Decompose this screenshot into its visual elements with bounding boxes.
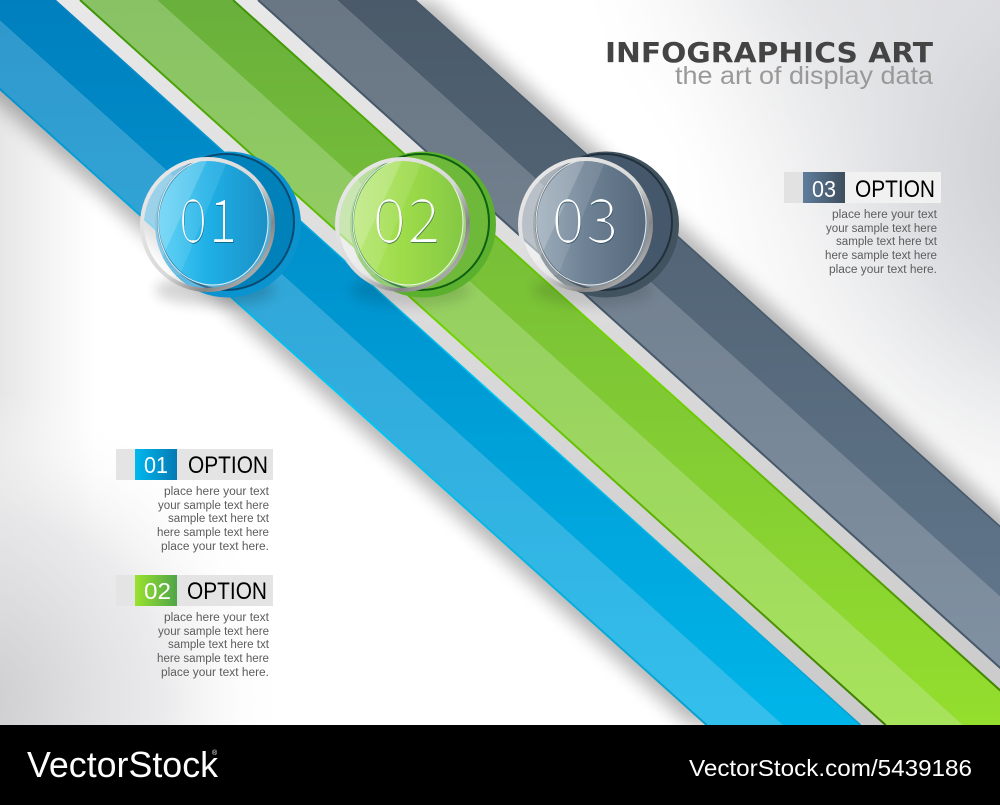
- option 03 block: [784, 172, 941, 276]
- option 01 text: place here your text: [164, 486, 270, 498]
- option 02 text: place your text here.: [161, 667, 269, 679]
- option 02 text: place here your text: [164, 612, 270, 624]
- option 01 header: OPTION: [188, 452, 268, 479]
- number 02: 02: [372, 171, 441, 261]
- option 01 text: here sample text here: [157, 527, 269, 539]
- option 01 text: sample text here txt: [168, 513, 270, 525]
- option 02 header: 02: [144, 578, 171, 604]
- option 03 text: place your text here.: [829, 264, 937, 276]
- option 02 text: here sample text here: [157, 653, 269, 665]
- number 03: 03: [551, 171, 619, 261]
- brand logo text: VectorStock: [27, 744, 219, 785]
- option 02 header: OPTION: [187, 578, 267, 605]
- blue diagonal band: [0, 0, 861, 725]
- grey diagonal band: [258, 0, 1000, 725]
- option 02 text: [157, 612, 270, 679]
- registered mark: ®: [212, 749, 218, 757]
- option 03 header: [784, 172, 941, 203]
- option 02 block: [116, 575, 273, 679]
- option 03 text: your sample text here: [826, 223, 937, 235]
- option 01 text: your sample text here: [158, 500, 269, 512]
- badge 03: [508, 150, 679, 306]
- image id: VectorStock.com/5439186: [689, 755, 972, 781]
- option 01 header: 01: [144, 452, 168, 478]
- badge 01: [130, 150, 301, 306]
- option 03 header: 03: [812, 176, 836, 202]
- subtitle: the art of display data: [675, 62, 933, 90]
- option 01 block: [116, 449, 273, 553]
- number 01: 01: [178, 171, 238, 261]
- option 03 text: place here your text: [832, 209, 938, 221]
- option 03 header: OPTION: [855, 176, 935, 203]
- option 02 text: your sample text here: [158, 626, 269, 638]
- title: [605, 36, 933, 90]
- option 02 text: sample text here txt: [168, 639, 270, 651]
- option 01 text: [157, 486, 270, 553]
- option 03 text: here sample text here: [825, 250, 937, 262]
- badge 02: [325, 150, 496, 306]
- footer bar: [0, 725, 1000, 805]
- option 03 text: sample text here txt: [836, 236, 938, 248]
- option 01 header: [116, 449, 273, 480]
- option 02 header: [116, 575, 273, 606]
- option 03 text: [825, 209, 938, 276]
- option 01 text: place your text here.: [161, 541, 269, 553]
- heading: infographics art: INFOGRAPHICS ART: [605, 36, 933, 69]
